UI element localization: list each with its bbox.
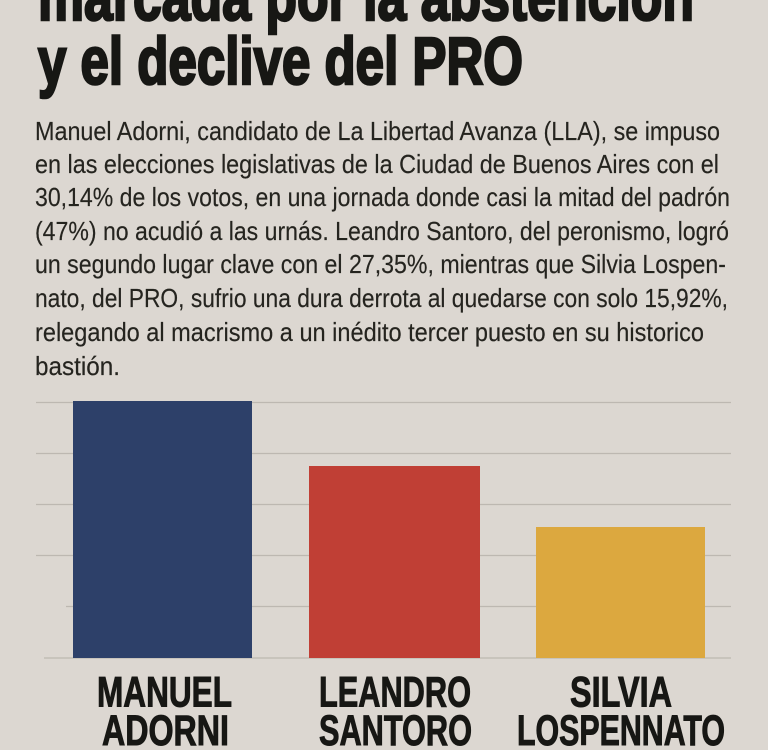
label: Manuel Adorni: [97, 668, 232, 750]
label: Manuel Adorni: MANUEL: [97, 668, 232, 716]
bar: Manuel Adorni: [73, 401, 252, 658]
body text block: [35, 116, 730, 381]
label: Leandro Santoro: LEANDRO: [319, 668, 471, 716]
bar: Leandro Santoro: [309, 466, 480, 658]
title: y el declive del PRO: [38, 24, 523, 99]
bar: Silvia Lospennato: [536, 527, 705, 658]
label: Silvia Lospennato: [517, 668, 725, 750]
body text block: relegando al macrismo a un inédito tercer puesto en su historico: [35, 317, 704, 347]
body text block: bastión.: [35, 351, 120, 381]
bar chart: [36, 401, 731, 658]
label: Leandro Santoro: [319, 668, 472, 750]
label: Silvia Lospennato: SILVIA: [570, 668, 672, 716]
